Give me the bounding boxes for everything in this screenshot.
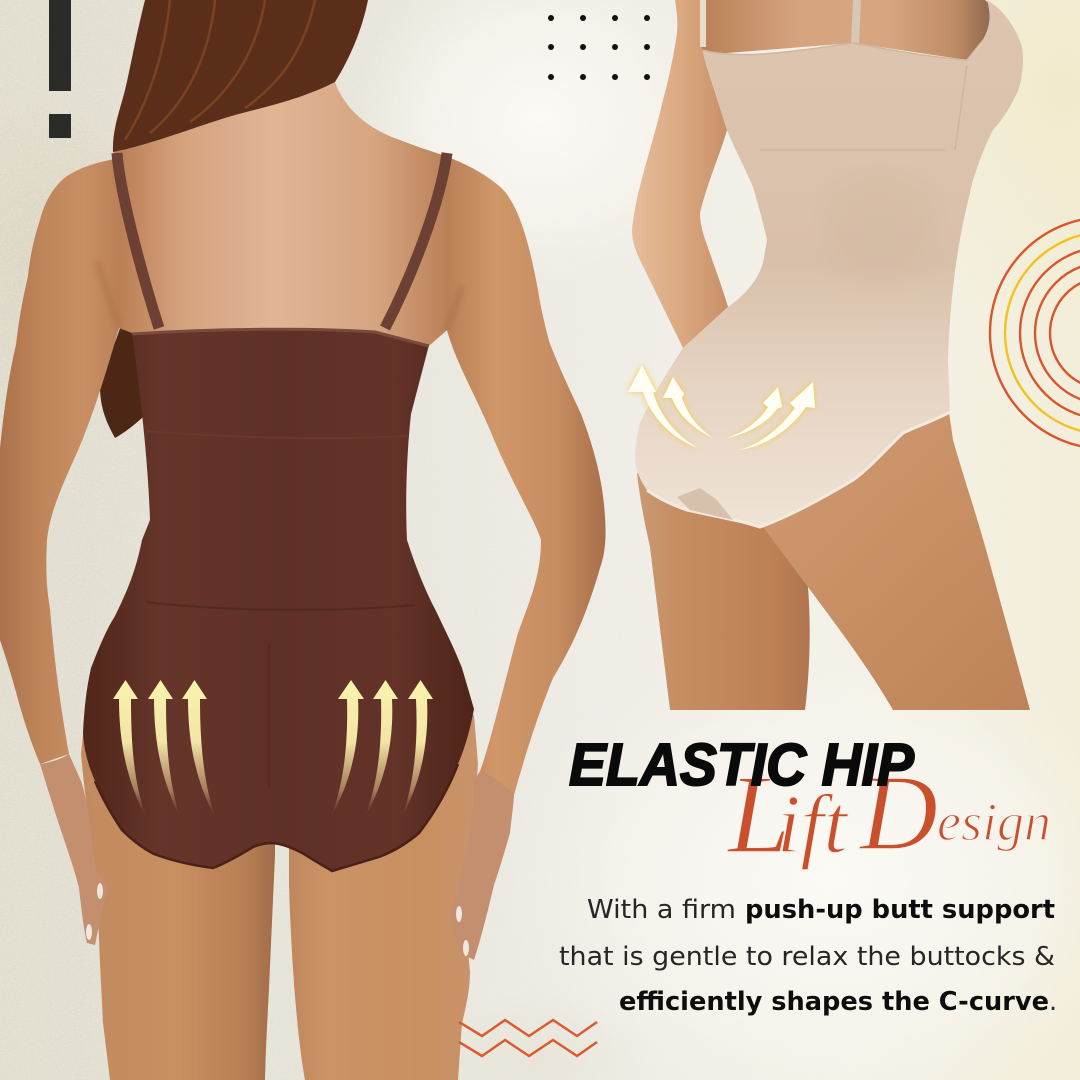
right leg <box>289 715 478 1080</box>
right model <box>632 0 1030 710</box>
right strap <box>385 153 447 328</box>
bodysuit hip band <box>146 602 415 610</box>
right model left strap <box>700 0 706 47</box>
heading: lift design script: D <box>858 754 938 873</box>
nude bodysuit <box>635 0 1023 527</box>
arrows: right model <box>628 365 815 450</box>
heading: elastic hip: ELASTIC HIP <box>569 732 915 798</box>
center seam <box>268 643 270 788</box>
bodysuit trim <box>647 412 950 527</box>
decoration: concentric circles <box>990 217 1080 449</box>
left hand <box>40 754 107 945</box>
decoration: exclamation mark <box>49 0 71 138</box>
arrow glow <box>628 365 815 450</box>
bodysuit gusset <box>677 488 733 520</box>
back and arms <box>0 82 606 795</box>
bodysuit waist band <box>146 431 408 438</box>
left leg <box>81 735 275 1080</box>
arrows: left model <box>113 680 433 817</box>
hair <box>113 0 368 152</box>
decoration: zigzag lines <box>459 1020 597 1056</box>
back shading <box>97 262 462 330</box>
bodysuit seams <box>702 40 983 150</box>
brown bodysuit <box>83 328 474 871</box>
decoration: dot grid <box>548 15 650 80</box>
right model arm <box>632 0 728 348</box>
body text <box>559 895 1057 1017</box>
right model right leg <box>763 405 1030 710</box>
bodysuit shading <box>825 175 935 285</box>
hair streaks <box>125 0 315 140</box>
right hand <box>450 771 514 960</box>
body text: that is gentle to relax the buttocks & <box>559 942 1055 972</box>
right model left leg <box>637 473 810 710</box>
lower hair strand <box>100 322 146 438</box>
body text: . <box>1049 987 1057 1017</box>
heading: lift design script: L <box>726 753 790 877</box>
heading: lift design script: esign <box>937 792 1051 852</box>
right model right strap <box>855 0 857 43</box>
left strap <box>117 153 159 328</box>
right model back skin <box>702 0 993 60</box>
body text: efficiently shapes the C-curve <box>619 987 1049 1017</box>
body text: push-up butt support <box>745 895 1055 925</box>
left model <box>0 0 606 1080</box>
fingernails <box>86 883 469 956</box>
bodysuit leg trim <box>95 764 458 871</box>
bodysuit top band <box>132 329 429 346</box>
body text: With a firm <box>587 895 736 925</box>
arrow bodies <box>628 365 815 450</box>
heading: lift design script: ift <box>777 778 850 871</box>
